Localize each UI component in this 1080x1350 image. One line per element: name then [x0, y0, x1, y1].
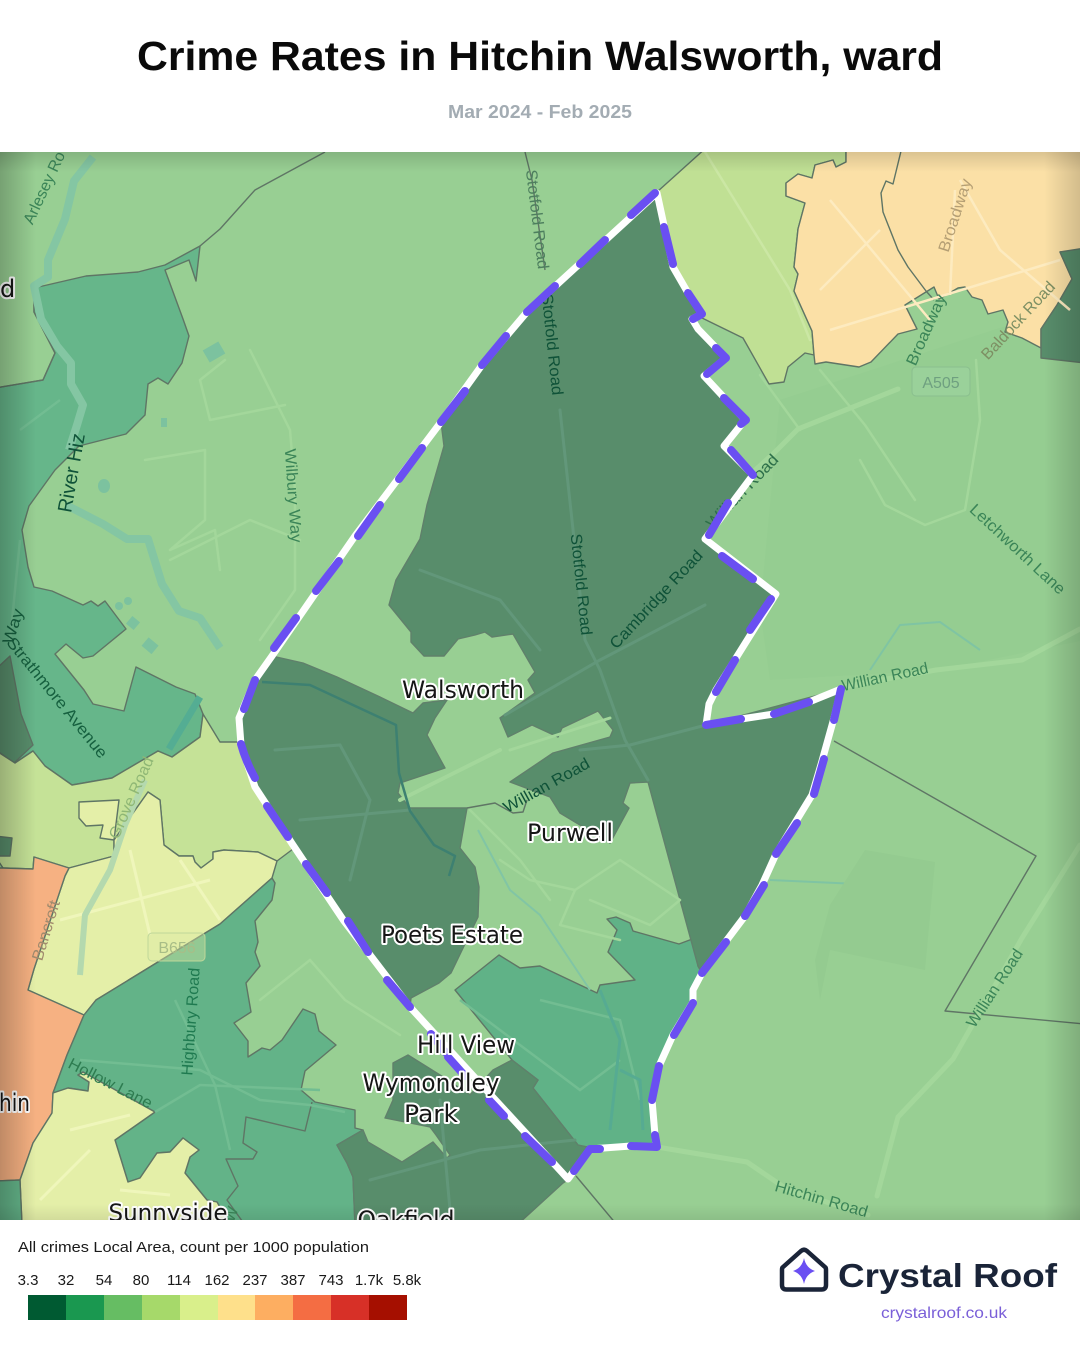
region: small far west dark [0, 836, 12, 856]
boundary line: north-west [200, 152, 325, 246]
road labels: Wilbury Way [281, 448, 304, 543]
legend scale values: 743 [318, 1272, 344, 1289]
region: central-west pale [28, 792, 277, 1015]
legend scale values [18, 1272, 422, 1289]
road labels [0, 149, 1068, 1224]
road labels: Stotfold Road [522, 169, 551, 270]
badge: B656 [148, 933, 205, 961]
road labels: Willian Road [964, 946, 1027, 1031]
road labels: Willian Road [501, 755, 593, 817]
boundary line: south-west inner [226, 1102, 312, 1225]
legend scale values: 80 [133, 1272, 149, 1289]
feature: farm buildings [844, 882, 880, 886]
legend scale values: 1.7k [355, 1272, 384, 1289]
place labels: Sunnyside [108, 1199, 228, 1227]
place labels: Walsworth [402, 676, 524, 704]
legend scale values: 162 [204, 1272, 230, 1289]
icon: house with star [782, 1250, 826, 1290]
region: south-west green [53, 878, 363, 1225]
title: Crime Rates in Hitchin Walsworth, ward [137, 33, 943, 79]
legend scale values: 54 [96, 1272, 112, 1289]
boundary line: east field [834, 741, 1080, 1024]
place labels: Oakfield [358, 1206, 454, 1234]
road labels: Letchworth Lane [966, 501, 1068, 598]
place labels: hin [0, 1089, 30, 1117]
road labels: Broadway [936, 177, 976, 254]
road labels: Hollow Lane [65, 1056, 155, 1112]
road labels: Grove Road [106, 755, 158, 842]
road labels: River Hiz [54, 432, 90, 514]
river Hiz [34, 157, 980, 1130]
road labels: Stotfold Road [538, 293, 565, 396]
place labels: Purwell [527, 819, 613, 847]
road network [145, 152, 1080, 1215]
legend scale values: 114 [167, 1272, 191, 1289]
road labels: Bancroft [30, 898, 64, 963]
badge: B656: B656 [158, 940, 196, 957]
region: far east dark corner [1041, 248, 1080, 363]
road labels: Broadway [904, 292, 950, 368]
boundary line: Willian Road [467, 800, 527, 813]
region: small pale block [79, 800, 119, 840]
place labels: Poets Estate [381, 921, 523, 949]
region: far west dark [0, 656, 33, 763]
legend scale values: 5.8k [393, 1272, 422, 1289]
subtitle: date range: Mar 2024 - Feb 2025 [448, 102, 632, 122]
legend scale values: 3.3 [18, 1272, 38, 1289]
region: ward west dark [239, 656, 479, 1007]
boundary line: Broadway divide [881, 147, 934, 300]
region: orange town centre [0, 857, 84, 1181]
road labels: Willian Road [703, 451, 782, 532]
place labels: Park [404, 1100, 458, 1128]
region: south-west pale [20, 1072, 230, 1225]
legend scale values: 387 [280, 1272, 306, 1289]
boundary line: river section [0, 302, 56, 388]
road labels: Strathmore Avenue [3, 635, 110, 762]
road labels: Highbury Road [179, 967, 204, 1076]
road labels: Baldock Road [978, 279, 1059, 363]
region: west yellow-green [0, 714, 293, 869]
road labels: Way [0, 607, 27, 646]
place labels: Hill View [417, 1031, 515, 1059]
logo: Crystal Roof [782, 1250, 1058, 1322]
place labels [0, 275, 613, 1234]
road labels: Stotfold Road [567, 533, 594, 636]
legend scale values: 32 [58, 1272, 74, 1289]
icons: small map features [98, 341, 225, 654]
road labels: Willian Road [840, 660, 930, 695]
region: north-east yellow-green [657, 147, 846, 384]
badge: A505: A505 [922, 375, 960, 392]
road labels: Arlesey Ro [21, 149, 69, 227]
place labels: d [0, 275, 15, 303]
region: ward south green [455, 917, 702, 1149]
region: bottom-left green [0, 1180, 22, 1225]
region: north-east yellow [786, 147, 1080, 367]
legend colour bar [28, 1295, 407, 1320]
legend scale values: 237 [242, 1272, 268, 1289]
region: west mid green [0, 246, 203, 785]
road labels: W [221, 1204, 243, 1224]
wordmark: Crystal Roof [838, 1257, 1058, 1294]
legend title: All crimes Local Area, count per 1000 population [18, 1239, 369, 1256]
ward boundary: white dashed base with purple dashes [239, 193, 841, 1179]
website link: crystalroof.co.uk [881, 1305, 1008, 1322]
road labels: Cambridge Road [607, 547, 707, 653]
region: ward north dark [389, 193, 841, 973]
boundary line: Stotfold [525, 152, 545, 270]
region: ward south dark [337, 1055, 588, 1225]
road labels: Hitchin Road [773, 1178, 870, 1221]
badge: A505 [912, 367, 970, 396]
place labels: Wymondley [362, 1069, 500, 1097]
boundary line: south [576, 1176, 614, 1220]
